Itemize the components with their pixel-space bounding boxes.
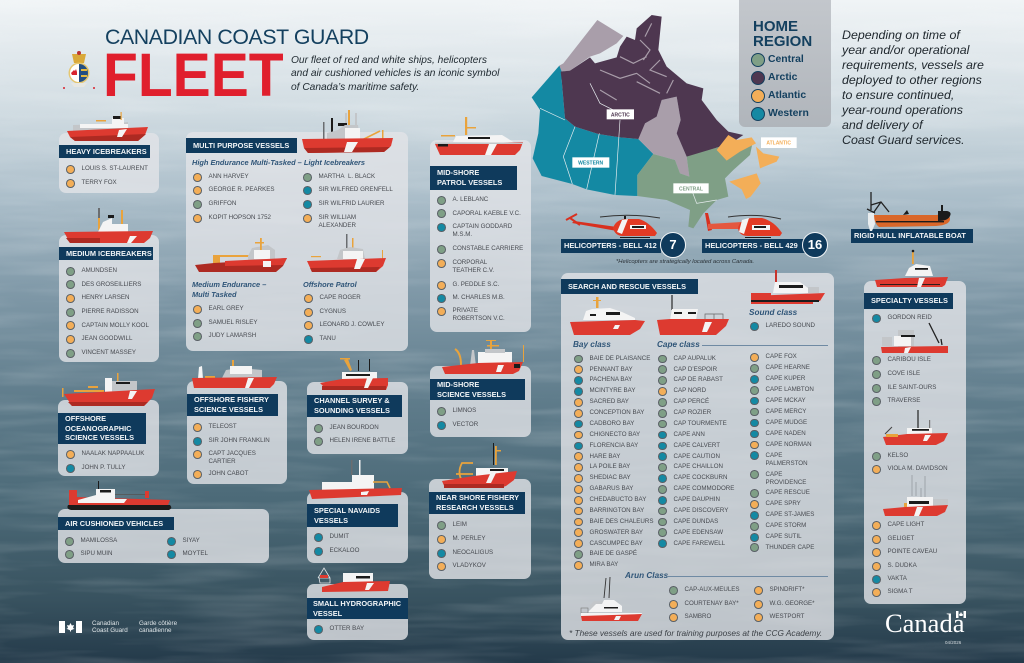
heading	[430, 166, 517, 190]
subheading: cape class: Cape class	[657, 340, 700, 349]
heading: OFFSHORE	[65, 414, 106, 423]
vessel list: cape class first column: CAPE DISCOVERY	[674, 507, 728, 514]
vessel list: cape class second column: CAPE HEARNE	[766, 364, 810, 371]
date code: 04/2026	[945, 640, 961, 645]
heading: SPECIAL NAVAIDS	[314, 506, 380, 515]
vessel list: A. LEBLANC	[452, 196, 488, 203]
ship: sar bay class	[570, 297, 645, 335]
deployment note	[841, 28, 984, 147]
heading: MID-SHORE	[437, 380, 479, 389]
heading	[307, 598, 408, 619]
vessel list: caribou isle class: ILE SAINT-OURS	[888, 384, 936, 391]
heading: NEAR SHORE FISHERY	[436, 493, 519, 502]
vessel list: bay class: CONCEPTION BAY	[590, 409, 644, 416]
vessel list: high endurance: GRIFFON	[208, 200, 236, 207]
vessel list: cape class first column: CAP ROZIER	[674, 409, 711, 416]
panel: home region legend	[739, 0, 831, 127]
heading: fleet: FLEET	[103, 41, 284, 109]
vessel list: cape class first column: CAPE DUNDAS	[674, 518, 718, 525]
vessel list: bay class: CADBORO BAY	[590, 420, 634, 427]
map of canada by home region: ARCTIC	[611, 112, 630, 118]
vessel list	[66, 267, 149, 358]
intro text: of Canada’s maritime safety.	[291, 82, 419, 93]
vessel list: CAPTAIN MOLLY KOOL	[82, 322, 149, 329]
vessel list	[66, 450, 144, 473]
vessel list: ROBERTSON V.C.	[452, 315, 505, 322]
agency name french: Garde côtière	[139, 620, 177, 627]
deployment note: to ensure continued,	[842, 88, 954, 102]
subheading: bay class: Bay class	[573, 340, 611, 349]
agency name english	[92, 620, 128, 634]
vessel list: bay class: BARRINGTON BAY	[590, 507, 644, 514]
vessel list: offshore patrol: LEONARD J. COWLEY	[320, 321, 384, 328]
subheading: sound class: Sound class	[749, 308, 797, 316]
heading: OFFSHORE FISHERY	[194, 395, 269, 404]
heading: helicopters bell 429: HELICOPTERS - BELL 429	[705, 241, 798, 250]
vessel list	[65, 537, 208, 559]
vessel list: cape class second column: CAPE MUDGE	[766, 419, 807, 426]
vessel list: cape class second column: CAPE SPRY	[766, 500, 801, 507]
heading	[430, 379, 525, 400]
vessel list: cape class second column: CAPE NORMAN	[766, 441, 812, 448]
ship: special navaids	[309, 460, 402, 499]
vessel list: cape class second column: CAPE KUPER	[766, 375, 805, 382]
vessel list	[437, 521, 493, 571]
panel: near shore fishery research vessels	[429, 479, 531, 579]
vessel list: DUMIT	[330, 533, 349, 540]
ship: medium endurance multi tasked	[195, 238, 287, 272]
panel: heavy icebreakers	[59, 133, 159, 193]
vessel list: medium endurance	[193, 305, 258, 341]
heading	[186, 138, 297, 153]
panel: multi purpose vessels	[186, 132, 408, 351]
deployment note: Coast Guard services.	[842, 133, 965, 147]
vessel list: CORPORAL	[452, 259, 487, 266]
vessel list: kelso and viola: VIOLA M. DAVIDSON	[888, 465, 948, 472]
ship: sar sound class	[751, 270, 825, 304]
agency name english: Canadian	[92, 620, 119, 627]
vessel list	[193, 423, 270, 479]
legend entries: Atlantic	[768, 90, 806, 101]
heading: RESEARCH VESSELS	[436, 503, 514, 512]
vessel list: JEAN BOURDON	[330, 424, 379, 431]
vessel list: SIPU MUIN	[80, 550, 112, 557]
vessel list: caribou isle class	[872, 356, 936, 406]
map of canada by home region: CENTRAL	[679, 186, 703, 192]
vessel list: high endurance: ALEXANDER	[318, 222, 356, 229]
legend heading	[753, 18, 812, 50]
ship: heavy icebreaker	[67, 112, 148, 141]
subheading: offshore patrol: Offshore Patrol	[303, 280, 357, 289]
vessel list: bay class: GROSWATER BAY	[590, 529, 643, 536]
deployment note: year and/or operational	[842, 43, 969, 57]
vessel list: cape class second column: CAPE MCKAY	[766, 397, 806, 404]
vessel list: cape light and others	[872, 521, 937, 597]
vessel list: bay class: HARE BAY	[590, 452, 620, 460]
vessel list: CAPTAIN GODDARD	[452, 223, 512, 230]
vessel list: arun class: WESTPORT	[770, 613, 804, 620]
ship: specialty cape light	[883, 475, 948, 516]
vessel list: SIR JOHN FRANKLIN	[208, 437, 270, 444]
heading: CHANNEL SURVEY &	[314, 396, 390, 405]
heading: SMALL HYDROGRAPHIC	[313, 599, 401, 608]
vessel list: NEOCALIGUS	[452, 549, 493, 556]
vessel list: VECTOR	[452, 421, 478, 428]
logo: canadian coast guard signature	[59, 620, 177, 634]
map of canada by home region: WESTERN	[578, 161, 604, 167]
vessel list: bay class: CASCUMPEC BAY	[590, 540, 643, 546]
vessel list: cape class second column: PROVIDENCE	[766, 478, 806, 486]
vessel list: cape class first column: CAPE CAUTION	[674, 452, 720, 460]
vessel list: offshore patrol	[304, 294, 384, 344]
vessel list	[314, 533, 360, 556]
vessel list: high endurance: SIR WILFRED GRENFELL	[318, 186, 393, 193]
vessel list: bay class: CHIGNECTO BAY	[590, 431, 640, 438]
title: CANADIAN COAST GUARD	[105, 25, 369, 49]
vessel list: high endurance: SIR WILLIAM	[318, 214, 356, 221]
vessel list: offshore patrol: CAPE ROGER	[320, 294, 361, 301]
vessel list: LOUIS S. ST-LAURENT	[82, 165, 148, 172]
vessel list: cape class first column: CAPE CALVERT	[674, 442, 720, 449]
panel: special navaids vessels	[307, 492, 408, 563]
vessel list: LEIM	[452, 521, 467, 528]
vessel list: M. PERLEY	[452, 535, 486, 542]
heading	[59, 247, 153, 260]
deployment note: Depending on time of	[842, 28, 960, 42]
ship: multi purpose light icebreaker	[302, 110, 393, 153]
heading: SCIENCE VESSELS	[65, 433, 134, 442]
vessel list: MAMILOSSA	[80, 537, 117, 544]
heading	[58, 413, 146, 444]
panel: medium icebreakers	[59, 235, 159, 362]
vessel list: gordon reid: GORDON REID	[888, 314, 932, 321]
intro text: and air cushioned vehicles is an iconic symbol	[291, 68, 499, 79]
vessel list: cape class first column: CAPE DAUPHIN	[674, 496, 720, 503]
map of canada by home region	[532, 15, 797, 228]
heading: rigid hull inflatable boat	[851, 229, 973, 243]
vessel list: cape class first column: CAPE ANN	[674, 431, 705, 438]
vessel list: cape class second column: CAPE RESCUE	[766, 489, 810, 496]
vessel list: caribou isle class: TRAVERSE	[888, 397, 920, 404]
vessel list: TERRY FOX	[82, 179, 117, 186]
count badge: 16	[802, 232, 828, 258]
vessel list: cape class second column: THUNDER CAPE	[766, 544, 814, 550]
subheading: multi tasked: Multi Tasked	[192, 290, 236, 299]
vessel list: cape class first column: CAP NORD	[674, 387, 706, 394]
vessel list: cape class first column: CAP AUPALUK	[674, 355, 716, 362]
vessel list: LIMNOS	[452, 407, 476, 414]
panel: offshore fishery science vessels	[187, 381, 287, 484]
heading: VESSELS	[314, 516, 348, 524]
heading: SEARCH AND RESCUE VESSELS	[568, 282, 686, 291]
vessel list: cape light and others: VAKTA	[888, 575, 907, 582]
vessel list: cape class second column: CAPE ST-JAMES	[766, 511, 814, 518]
panel: small hydrographic vessel	[307, 584, 408, 640]
ship: channel survey	[320, 358, 388, 390]
heading: helicopters bell 412: HELICOPTERS - BELL 412	[564, 241, 657, 250]
vessel list: arun class: SPINDRIFT*	[770, 586, 805, 593]
heading	[307, 504, 398, 527]
deployment note: deployed to other regions	[842, 73, 982, 87]
heading	[307, 395, 402, 417]
vessel list: CARTIER	[208, 458, 236, 465]
vessel list: arun class	[669, 586, 815, 622]
vessel list: offshore patrol: TANU	[320, 335, 336, 342]
icon: coast guard crest	[63, 51, 95, 89]
heading: rigid hull inflatable boat: RIGID HULL INFLATABLE BOAT	[854, 231, 966, 240]
vessel list: kelso and viola: KELSO	[888, 452, 908, 459]
vessel list: VLADYKOV	[452, 562, 486, 569]
vessel list: cape class second column: CAPE	[766, 470, 782, 478]
vessel list: high endurance: SIR WILFRID LAURIER	[318, 200, 385, 207]
vessel list: MOYTEL	[182, 550, 208, 557]
vessel list: cape class second column: CAPE NADEN	[766, 430, 806, 437]
vessel list: cape class second column: PALMERSTON	[766, 460, 808, 466]
ship: medium icebreaker	[64, 208, 153, 243]
helicopter note: *Helicopters are strategically located across Canada.	[616, 259, 754, 265]
vessel list: caribou isle class: COVE ISLE	[888, 370, 920, 377]
ship: offshore fishery science	[192, 360, 277, 388]
vessel list: CAPORAL KAEBLE V.C.	[452, 210, 521, 216]
vessel list: cape class second column	[750, 353, 814, 552]
ship: mid-shore patrol	[435, 117, 523, 155]
vessel list: high endurance: GEORGE R. PEARKES	[208, 186, 275, 193]
deployment note: requirements, vessels are	[842, 58, 984, 72]
vessel list: high endurance: ANN HARVEY	[208, 173, 249, 180]
vessel list: PIERRE RADISSON	[82, 308, 139, 315]
heading	[187, 394, 278, 416]
vessel list: cape class first column: CAPE COCKBURN	[674, 474, 727, 481]
heading	[864, 293, 953, 309]
vessel list: bay class	[574, 355, 654, 570]
footnote: * These vessels are used for training purposes at the CCG Academy.	[569, 628, 822, 638]
panel: channel survey and sounding vessels	[307, 382, 408, 454]
vessel list: cape light and others: CAPE LIGHT	[888, 521, 924, 528]
ship: specialty kelso	[883, 410, 948, 445]
vessel list: G. PEDDLE S.C.	[452, 281, 499, 288]
vessel list: bay class: BAIE DE PLAISANCE	[590, 355, 650, 362]
ship: offshore oceanographic	[62, 373, 155, 406]
agency name french: canadienne	[139, 627, 172, 634]
ship: sar cape class	[657, 295, 729, 335]
heading	[561, 279, 698, 294]
vessel list	[314, 424, 396, 446]
vessel list: high endurance: KOPIT HOPSON 1752	[208, 214, 271, 221]
vessel list: JOHN CABOT	[208, 470, 248, 477]
agency name french	[139, 620, 177, 634]
vessel list: cape class first column	[658, 355, 734, 548]
vessel list: caribou isle class: CARIBOU ISLE	[888, 356, 931, 363]
heading: MEDIUM ICEBREAKERS	[66, 249, 152, 258]
vessel list: bay class: SHEDIAC BAY	[590, 474, 631, 481]
ship: offshore patrol	[307, 234, 386, 272]
heading: helicopters bell 412	[561, 239, 661, 253]
vessel list: bay class: PACHENA BAY	[590, 376, 632, 383]
panel: mid-shore patrol vessels	[430, 140, 531, 332]
vehicle: rigid hull inflatable boat	[867, 192, 951, 231]
heading: PATROL VESSELS	[437, 178, 502, 187]
legend entries: Arctic	[768, 72, 797, 83]
vessel list: bay class: SACRED BAY	[590, 398, 629, 405]
heading: HEAVY ICEBREAKERS	[66, 147, 147, 156]
agency name english: Coast Guard	[92, 627, 128, 634]
vessel list: bay class: PENNANT BAY	[590, 366, 633, 373]
vessel list: cape class second column: CAPE SUTIL	[766, 533, 802, 540]
count badge: 7: 7	[669, 237, 677, 252]
subheading: high endurance: High Endurance Multi-Tasked – Light Icebreakers	[192, 158, 365, 167]
subheading: arun class: Arun Class	[625, 571, 668, 580]
vessel list: bay class: BAIE DES CHALEURS	[590, 518, 653, 525]
heading: AIR CUSHIONED VEHICLES	[65, 519, 163, 528]
vessel list: medium endurance: EARL GREY	[208, 305, 244, 312]
heading	[58, 517, 174, 530]
vessel list: cape class first column: CAPE COMMODORE	[674, 485, 734, 492]
vessel list: medium endurance: SAMUEL RISLEY	[208, 319, 257, 326]
vessel list: cape light and others: S. DUDKA	[888, 562, 917, 569]
vessel list: cape class first column: CAP TOURMENTE	[674, 420, 727, 427]
vessel list: cape light and others: POINTE CAVEAU	[888, 548, 937, 555]
vessel list: cape class first column: CAP DE RABAST	[674, 376, 723, 383]
vessel list: M.S.M.	[452, 231, 472, 238]
vessel list: PRIVATE	[452, 307, 478, 314]
vessel list: cape class first column: CAP PERCÉ	[674, 398, 709, 405]
vessel list	[66, 165, 148, 188]
vessel list: AMUNDSEN	[82, 267, 117, 274]
vessel list: kelso and viola	[872, 452, 948, 474]
vessel list: cape class second column: CAPE MERCY	[766, 408, 806, 415]
ship: specialty gordon reid	[875, 250, 948, 287]
vessel list: cape class second column: CAPE	[766, 452, 782, 458]
intro text	[291, 55, 500, 93]
vessel list: high endurance	[193, 173, 393, 229]
vessel list: high endurance: MARTHA L. BLACK	[318, 173, 375, 180]
heading: MULTI PURPOSE VESSELS	[193, 141, 289, 150]
vessel list: TEATHER C.V.	[452, 267, 494, 274]
vessel list: OTTER BAY	[330, 625, 364, 632]
vessel list: arun class: COURTENAY BAY*	[684, 600, 739, 607]
vessel list: cape class second column: CAPE LAMBTON	[766, 386, 814, 393]
heading: helicopters bell 429	[702, 239, 805, 253]
helicopter: bell 412	[566, 214, 660, 238]
vessel list: cape light and others: GELIGET	[888, 535, 914, 542]
vessel list: TELEOST	[208, 423, 237, 430]
vessel list	[437, 407, 478, 430]
vessel list: cape class first column: CAP D’ESPOIR	[674, 366, 717, 373]
heading: OCEANOGRAPHIC	[65, 424, 132, 433]
legend heading: HOME	[753, 18, 798, 35]
vessel list	[437, 196, 523, 322]
heading: SCIENCE VESSELS	[194, 405, 263, 414]
vessel list: arun class: CAP-AUX-MEULES	[684, 586, 740, 593]
vessel list: JOHN P. TULLY	[82, 464, 126, 471]
count badge: 7	[660, 232, 686, 258]
vessel list: arun class: W.G. GEORGE*	[770, 600, 815, 607]
vessel list: bay class: FLORENCIA BAY	[590, 442, 638, 449]
legend entries	[751, 53, 809, 121]
heading	[59, 145, 150, 158]
vessel list: CONSTABLE CARRIERE	[452, 245, 523, 252]
legend entries: Western	[768, 108, 809, 119]
helicopter: bell 429	[705, 213, 782, 238]
heading: SCIENCE VESSELS	[437, 390, 506, 398]
panel: offshore oceanographic science vessels	[58, 400, 159, 476]
vessel list: arun class: SAMBRO	[684, 613, 711, 620]
ship: small hydrographic	[318, 568, 390, 592]
vessel list: cape class second column: CAPE STORM	[766, 522, 806, 529]
legend heading: REGION	[753, 33, 812, 50]
panel: specialty vessels	[864, 281, 966, 604]
vessel list: offshore patrol: CYGNUS	[320, 308, 346, 315]
vessel list: bay class: MCINTYRE BAY	[590, 387, 635, 394]
vessel list: JEAN GOODWILL	[82, 335, 132, 342]
icon: canadian flag	[59, 621, 82, 633]
logo: canada wordmark: Canada	[885, 608, 964, 638]
deployment note: and delivery of	[842, 118, 923, 132]
vessel list: bay class: CHEDABUCTO BAY	[590, 496, 646, 503]
ship: specialty caribou isle	[881, 323, 948, 353]
vessel list: DES GROSEILLIERS	[82, 281, 141, 288]
ship: mid-shore science	[442, 340, 524, 374]
vessel list: cape class first column: CAPE CHAILLON	[674, 463, 723, 470]
map of canada by home region: ATLANTIC	[766, 140, 791, 146]
heading: VESSEL	[313, 608, 342, 618]
vessel list: ECKALOO	[330, 547, 359, 554]
heading: SPECIALTY VESSELS	[871, 296, 948, 305]
vessel list: M. CHARLES M.B.	[452, 294, 505, 301]
count badge: 16: 16	[808, 237, 822, 252]
heading: SOUNDING VESSELS	[314, 406, 390, 415]
vessel list: medium endurance: JUDY LAMARSH	[208, 332, 256, 339]
vessel list: cape class first column: CAPE FAREWELL	[674, 540, 725, 546]
deployment note: year-round operations	[842, 103, 963, 117]
heading	[429, 492, 525, 514]
panel: mid-shore science vessels	[430, 366, 531, 437]
ship: near shore fishery research	[442, 443, 517, 488]
vessel list: cape light and others: SIGMA T	[888, 588, 912, 595]
vessel list: CAPT JACQUES	[208, 450, 256, 457]
vessel list: sound class: LAREDO SOUND	[766, 322, 815, 329]
panel: air cushioned vehicles	[58, 509, 269, 563]
legend entries: Central	[768, 54, 804, 65]
vessel list: HENRY LARSEN	[82, 294, 129, 301]
heading: MID-SHORE	[437, 168, 479, 177]
vessel list: SIYAY	[182, 537, 200, 544]
vessel list: bay class: MIRA BAY	[590, 561, 618, 568]
ship: sar arun class	[581, 577, 642, 621]
vessel list: bay class: LA POILE BAY	[590, 463, 630, 470]
vehicle: air cushioned	[67, 481, 171, 510]
vessel list: VINCENT MASSEY	[82, 349, 136, 356]
vessel list: bay class: GABARUS BAY	[590, 485, 633, 492]
subheading: medium endurance: Medium Endurance –	[192, 280, 266, 289]
vessel list: cape class second column: CAPE FOX	[766, 353, 797, 360]
panel: search and rescue vessels	[561, 273, 834, 640]
vessel list: NAALAK NAPPAALUK	[82, 450, 144, 457]
vessel list: bay class: BAIE DE GASPÉ	[590, 550, 637, 557]
vessel list: cape class first column: CAPE EDENSAW	[674, 529, 723, 536]
intro text: Our fleet of red and white ships, helicopters	[291, 55, 487, 66]
vessel list: HELEN IRENE BATTLE	[330, 437, 395, 444]
